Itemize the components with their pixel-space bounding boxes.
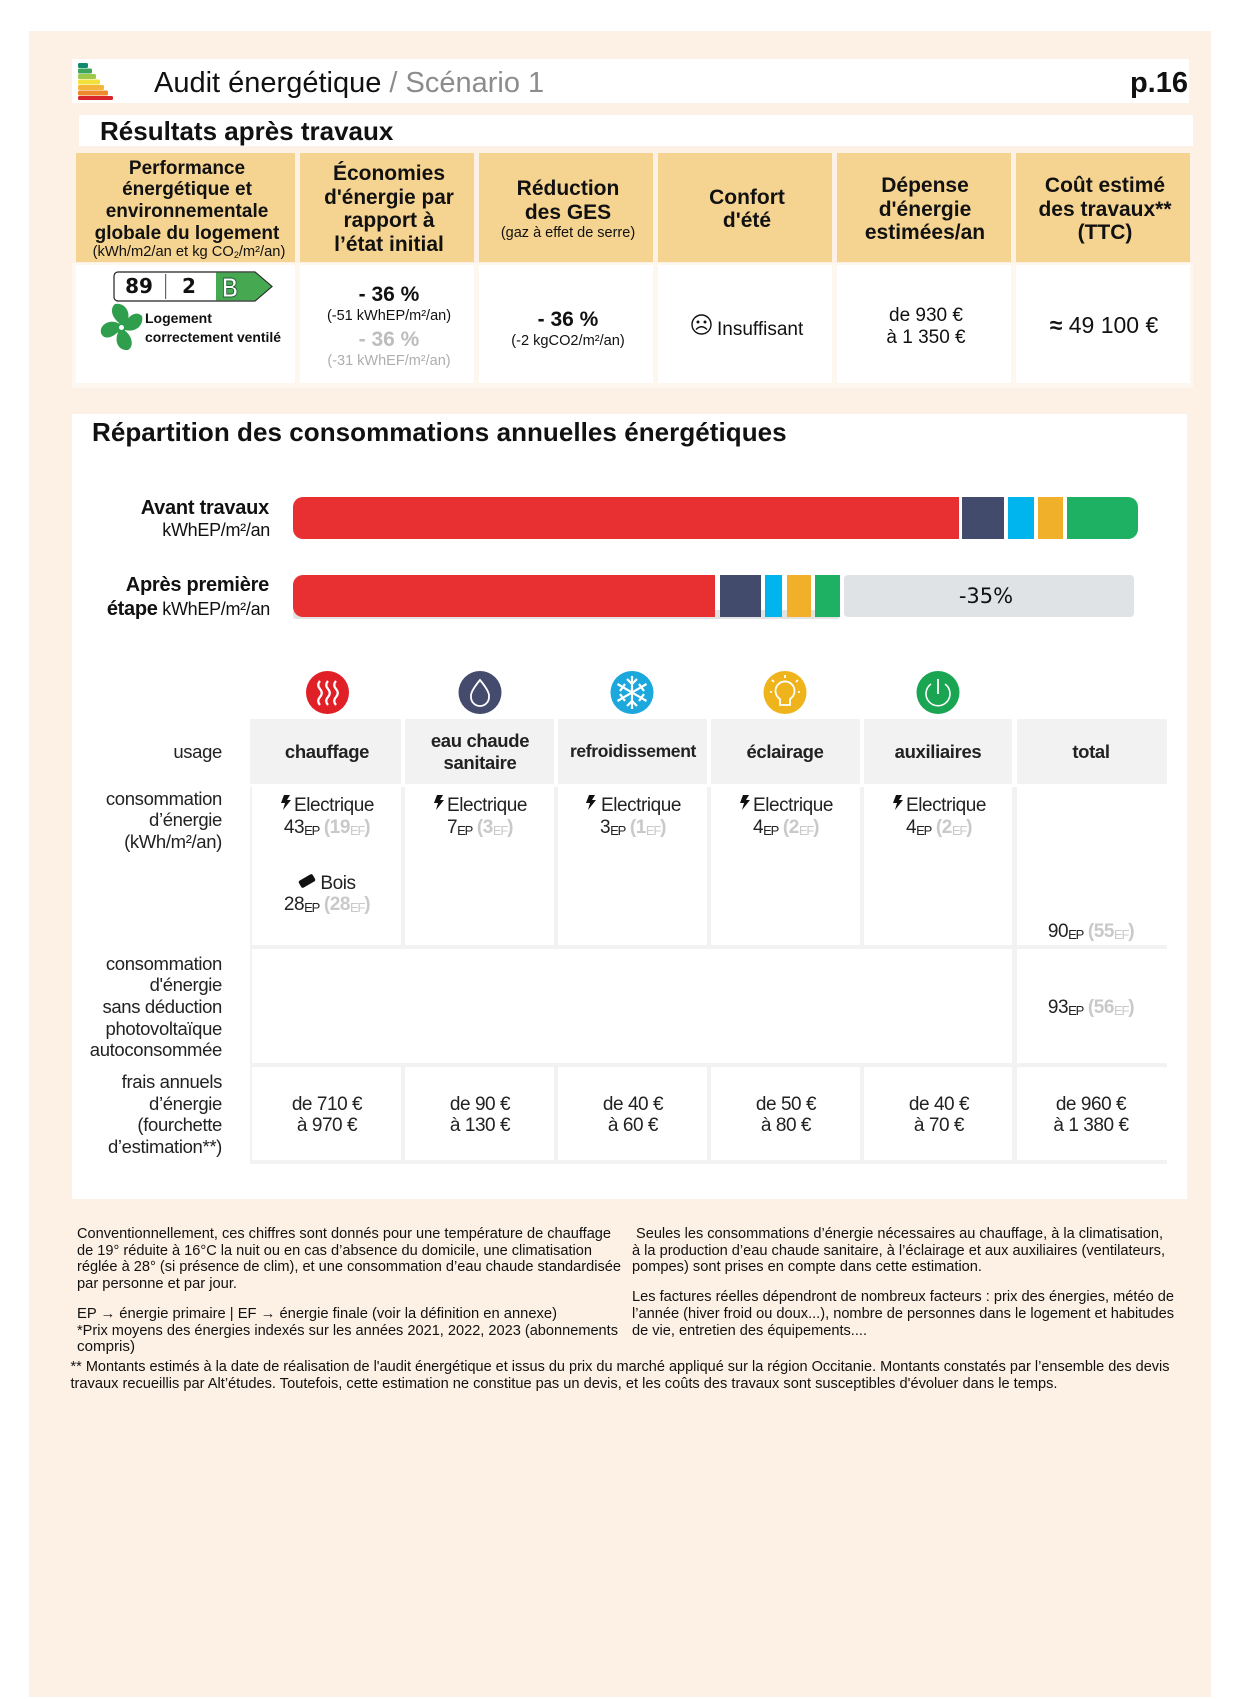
column: works cost: ≈ 49 100 € [1050,312,1158,338]
row labels: consommation [106,953,222,974]
column: energy savings: (-51 kWhEP/m²/an) [327,308,451,324]
label: before works: Avant travaux [141,497,269,519]
column: GHG reduction: Réduction [517,177,619,200]
footnotes: right column: Les factures réelles dépendront de nombreux facteurs : prix des énergies, météo de [632,1289,1174,1305]
column: performance: globale du logement [95,223,280,244]
column: chauffage: ) [364,817,370,838]
heading: results after works: Résultats après travaux [100,116,394,146]
column: chauffage: à 970 € [297,1115,358,1136]
column: auxiliaires: ) [966,817,972,838]
row labels: autoconsommée [90,1039,222,1060]
column: total: total [1072,741,1110,762]
column: auxiliaires: (2 [931,817,952,838]
column: chauffage: EP [304,900,320,915]
column: total: 90 [1048,921,1068,942]
column: GHG reduction [479,153,653,383]
row labels: usage [173,741,222,762]
column: auxiliaires: à 70 € [914,1115,965,1136]
column: éclairage: de 50 € [756,1094,817,1115]
column: performance: 2 [234,250,239,260]
column: chauffage: 28 [284,894,304,915]
panel: annual consumption breakdown [72,414,1187,1199]
footnotes: right column: de vie, entretien des équipements.... [632,1323,867,1339]
bar chart: after first stage [293,575,1134,619]
column: chauffage: EF [350,900,365,915]
column: chauffage [250,719,401,1136]
heading: Répartition des consommations annuelles énergétiques [92,417,787,447]
column: eau chaude sanitaire: Electrique [447,795,527,816]
column: total [1017,719,1167,1136]
column: refroidissement: à 60 € [608,1115,659,1136]
column: eau chaude sanitaire: EF [493,823,508,838]
DPE badge 89 / 2 / B: 89 [125,274,153,298]
footnotes: right column: à la production d’eau chaude sanitaire, à l’éclairage et aux auxiliaires (ventilateurs, [632,1243,1165,1259]
column: auxiliaires: EF [952,823,967,838]
footnotes: right column: pompes) sont prises en compte dans cette estimation. [632,1259,982,1275]
footnotes: left column: réglée à 28° (si présence de clim), et une consommation d’eau chaude standardisée [77,1259,621,1275]
column: GHG reduction: (-2 kgCO2/m²/an) [511,333,625,349]
column: chauffage: EP [304,823,320,838]
column: summer comfort: Insuffisant [717,319,804,340]
column: éclairage: 4 [753,817,763,838]
column: eau chaude sanitaire: de 90 € [450,1094,511,1115]
row labels: consommation [106,788,222,809]
footnote: works cost estimate: travaux recueillis par Alt’études. Toutefois, cette estimation ne constitue pas un devis, et les coûts des travaux sont susceptibles d'évoluer dans le temps. [70,1376,1058,1392]
column: éclairage: à 80 € [761,1115,812,1136]
column: total: EF [1114,927,1129,942]
icon: heating [306,671,349,714]
column: refroidissement: Electrique [601,795,681,816]
row labels: photovoltaïque [106,1018,222,1039]
icon: sad face [692,315,711,334]
header bar [72,59,1189,103]
footnote: works cost estimate: ** Montants estimés à la date de réalisation de l'audit énergétique et issus du prix du marché appliqué sur la région Occitanie. Montants constatés par l’ensemble des devis [70,1359,1170,1375]
column: auxiliaires: auxiliaires [895,741,981,762]
panel: results table [72,153,1193,388]
column: performance: énergétique et [122,179,253,200]
column: refroidissement: refroidissement [570,741,697,761]
icon: ventilation fan [101,304,142,350]
column: energy savings: Économies [333,162,445,185]
column: refroidissement [558,719,707,1136]
column: eau chaude sanitaire: EP [457,823,473,838]
column: total: ) [1128,997,1134,1018]
column: eau chaude sanitaire: ) [507,817,513,838]
column: energy spend: Dépense [881,174,969,197]
column: performance [76,153,295,383]
icon: snowflake [610,671,654,714]
row labels: sans déduction [102,996,222,1017]
table grid [250,787,1167,1164]
row labels: d’énergie [149,809,222,830]
column: chauffage: ) [364,894,370,915]
column: auxiliaires: EP [916,823,932,838]
column: auxiliaires: de 40 € [909,1094,970,1115]
column: total: (56 [1083,997,1114,1018]
row labels: d'énergie [150,974,222,995]
column: chauffage: 43 [284,817,304,838]
column: GHG reduction: des GES [525,201,611,224]
footnotes: left column [77,1226,621,1355]
column: energy spend: de 930 € [889,305,963,326]
column: energy savings: rapport à [343,209,435,232]
column: éclairage: (2 [778,817,799,838]
column: summer comfort: Confort [709,186,785,209]
column: éclairage: EP [763,823,779,838]
column: eau chaude sanitaire: 7 [447,817,457,838]
column: éclairage: EF [799,823,814,838]
column: GHG reduction: (gaz à effet de serre) [501,225,635,241]
footnotes: right column: Seules les consommations d’énergie nécessaires au chauffage, à la climatisation, [636,1226,1163,1242]
column: energy savings: l’état initial [334,233,444,256]
DPE badge 89 / 2 / B: 2 [182,274,196,298]
label: after first stage: étape kWhEP/m²/an [107,598,270,620]
table: consumption by use [90,719,1167,1164]
column: total: (55 [1083,921,1115,942]
row labels: (kWh/m²/an) [124,831,222,852]
column: energy savings [300,153,474,383]
column: refroidissement: EP [610,823,626,838]
footnotes: left column: Conventionnellement, ces chiffres sont donnés pour une température de chauffage [77,1226,611,1242]
column: performance: (kWh/m2/an et kg CO [93,244,234,260]
column: performance: environnementale [106,201,268,222]
row labels: (fourchette [137,1114,222,1135]
column: performance: /m²/an) [239,244,285,260]
column: refroidissement: EF [646,823,661,838]
column: éclairage: Electrique [753,795,833,816]
column: performance: Performance [129,158,245,179]
column: total: ) [1128,921,1134,942]
icon: energy rating scale [78,63,113,100]
column: energy spend: d'énergie [879,198,971,221]
heading: results after works [79,115,1193,146]
footnotes: right column [632,1226,1174,1339]
row labels: frais annuels [122,1071,222,1092]
column: éclairage [711,719,860,1136]
column: total: 93 [1048,997,1068,1018]
row labels: d’estimation**) [108,1136,222,1157]
column: eau chaude sanitaire: eau chaude [431,730,529,751]
column: refroidissement: (1 [625,817,647,838]
column: total: de 960 € [1056,1094,1127,1115]
column: auxiliaires: Electrique [906,795,986,816]
column: éclairage: ) [813,817,819,838]
column: total: EF [1114,1003,1129,1018]
column: eau chaude sanitaire: à 130 € [450,1115,511,1136]
column: refroidissement: 3 [600,817,610,838]
ventilation label: correctement ventilé [145,329,281,345]
column: energy savings: (-31 kWhEF/m²/an) [327,353,451,369]
row labels: d’énergie [149,1093,222,1114]
column: total: EP [1068,1003,1084,1018]
icon: hot water drop [458,671,502,714]
footnotes: left column: *Prix moyens des énergies indexés sur les années 2021, 2022, 2023 (abonnements [77,1323,618,1339]
column: chauffage: de 710 € [292,1094,363,1115]
icon: power button [916,671,960,714]
DPE badge 89 / 2 / B [114,272,272,303]
column: chauffage: EF [350,823,365,838]
bar chart: after first stage: -35% [959,584,1013,608]
column: eau chaude sanitaire: sanitaire [444,752,517,773]
column: energy savings: - 36 % [359,283,420,306]
column: chauffage: (19 [319,817,350,838]
column: summer comfort [658,153,832,383]
ventilation label: Logement [145,310,212,326]
label: after first stage [107,574,270,620]
icon: light bulb [764,671,806,714]
footnote: works cost estimate [70,1359,1170,1392]
ventilation label [145,310,281,345]
page number: p.16 [1130,67,1188,99]
column: energy spend: estimées/an [865,221,985,244]
label: before works: kWhEP/m²/an [162,520,270,540]
column: éclairage: éclairage [746,741,824,762]
column: eau chaude sanitaire: (3 [472,817,493,838]
column: total: à 1 380 € [1053,1115,1129,1136]
bar chart: before works [293,497,1138,539]
column: energy spend: à 1 350 € [886,327,966,348]
column: eau chaude sanitaire [405,719,554,1136]
column: auxiliaires [864,719,1012,1136]
column: works cost: (TTC) [1078,221,1132,244]
label: after first stage: Après première [126,574,269,596]
DPE badge 89 / 2 / B: B [222,272,238,303]
column: chauffage: Electrique [294,795,374,816]
column: total: EP [1068,927,1084,942]
column: energy spend [837,153,1011,383]
column: works cost [1016,153,1190,383]
column: refroidissement: de 40 € [603,1094,664,1115]
column: auxiliaires: 4 [906,817,916,838]
footnotes: left column: compris) [77,1339,135,1355]
column: energy savings: d'énergie par [324,186,454,209]
footnotes: left column: EP → énergie primaire | EF → énergie finale (voir la définition en annexe) [77,1306,557,1322]
column: chauffage: (28 [319,894,350,915]
column: refroidissement: ) [660,817,666,838]
column: GHG reduction: - 36 % [538,308,599,331]
footnotes: right column: l’année (hiver froid ou doux...), nombre de personnes dans le logement et habitudes [632,1306,1174,1322]
column: chauffage: chauffage [285,741,369,762]
column: energy savings: - 36 % [359,328,420,351]
column: works cost: des travaux** [1038,198,1172,221]
column: works cost: Coût estimé [1045,174,1165,197]
title: Audit énergétique / Scénario 1 [154,67,544,99]
row labels [90,741,222,1157]
label: before works [141,497,270,540]
footnotes: left column: par personne et par jour. [77,1276,237,1292]
footnotes: left column: de 19° réduite à 16°C la nuit ou en cas d’absence du domicile, une climatisation [77,1243,592,1259]
column: summer comfort: d'été [723,209,771,232]
column: chauffage: Bois [320,873,356,894]
